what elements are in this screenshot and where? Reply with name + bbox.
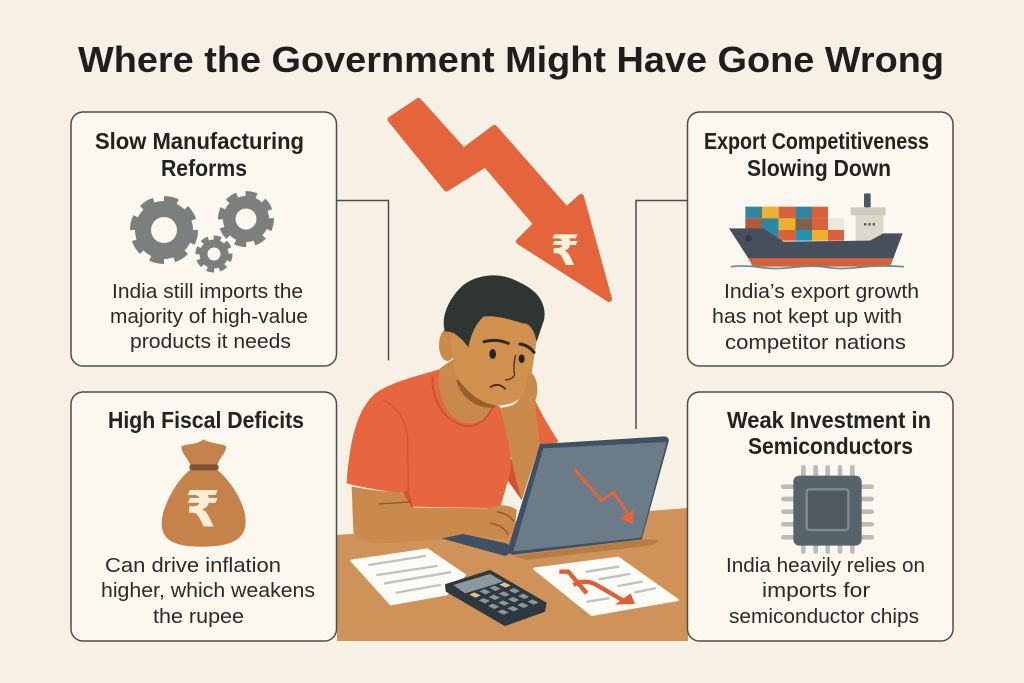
screen chart	[574, 469, 627, 513]
icon: money bag	[162, 439, 246, 547]
jaw shadow	[457, 380, 495, 407]
eyes	[489, 349, 496, 359]
calculator	[446, 571, 546, 625]
left paper lines	[369, 556, 450, 593]
body text: India heavily relies on	[726, 555, 925, 577]
body text: higher, which weakens	[101, 580, 315, 602]
calculator keys	[469, 582, 539, 615]
nose	[505, 355, 516, 380]
panel: slow manufacturing reforms	[71, 112, 336, 366]
right paper chart	[559, 572, 623, 601]
ear	[439, 329, 456, 361]
hair	[444, 275, 545, 347]
connector: right	[636, 200, 687, 429]
shirt	[347, 368, 511, 508]
arrow: falling rupee	[390, 101, 609, 299]
right paper	[534, 558, 678, 615]
panel: high fiscal deficits	[71, 392, 336, 641]
calculator screen	[453, 574, 503, 593]
heading: High Fiscal Deficits	[108, 407, 304, 433]
eyebrows	[484, 340, 534, 352]
near arm and hand	[352, 487, 517, 543]
sleeve seam	[383, 400, 408, 493]
icon: container ship	[729, 193, 904, 268]
finger lines	[490, 512, 514, 535]
mouth	[490, 385, 506, 389]
chart arrowhead	[619, 509, 634, 524]
heading: Export Competitiveness	[704, 128, 929, 154]
icon: money bag: ₹	[185, 482, 220, 538]
face	[450, 307, 540, 405]
forearm	[500, 400, 557, 498]
icon: gears	[134, 194, 271, 270]
arrow: falling rupee: ₹	[550, 227, 580, 274]
keyboard base	[442, 534, 515, 556]
desk	[337, 508, 688, 641]
screen face	[513, 442, 667, 551]
body text: products it needs	[130, 331, 291, 353]
screen back	[508, 436, 669, 555]
connector: left	[337, 200, 388, 360]
heading: Semiconductors	[748, 433, 913, 459]
body text: the rupee	[153, 606, 244, 628]
neck	[439, 357, 500, 423]
far sleeve	[505, 402, 558, 500]
body text: majority of high-value	[110, 306, 308, 328]
panel: export competitiveness	[688, 112, 953, 366]
heading: Slow Manufacturing	[95, 128, 304, 154]
laptop	[442, 436, 669, 560]
papers and calculator	[351, 549, 678, 625]
right paper lines	[587, 567, 655, 602]
person at laptop	[347, 275, 558, 543]
body text: competitor nations	[725, 332, 906, 354]
elbow crease	[378, 502, 410, 504]
laptop shadow	[513, 539, 658, 560]
left paper	[351, 549, 465, 604]
heading: Weak Investment in	[727, 407, 931, 433]
body text: has not kept up with	[712, 306, 902, 328]
body text: India still imports the	[112, 281, 303, 303]
far sleeve strip	[535, 403, 558, 445]
collar	[432, 377, 493, 426]
heading: Slowing Down	[747, 155, 891, 181]
body text: semiconductor chips	[729, 606, 919, 628]
panel: weak investment in semiconductors	[688, 392, 953, 641]
body text: imports for	[762, 580, 870, 602]
icon: microchip	[783, 467, 872, 552]
title: Where the Government Might Have Gone Wrong	[78, 39, 944, 80]
heading: Reforms	[161, 155, 247, 181]
paper arrowhead	[615, 593, 635, 605]
body text: Can drive inflation	[105, 555, 281, 577]
sleeve shadow	[403, 490, 413, 507]
hand on cheek	[503, 370, 537, 410]
body text: India’s export growth	[724, 281, 919, 303]
